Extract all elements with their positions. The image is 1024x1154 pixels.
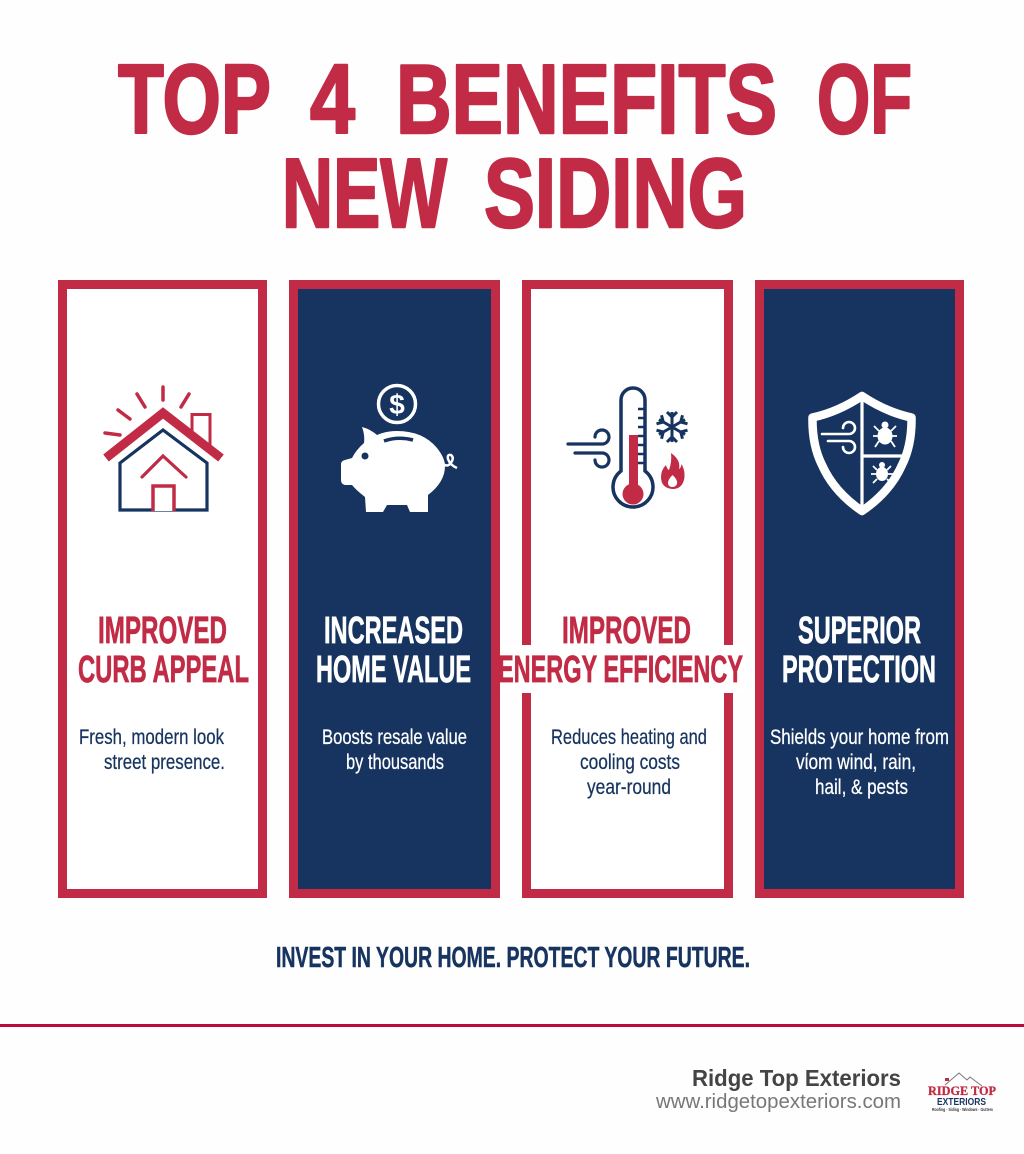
heading: improved energy efficiency: IMPROVED <box>562 610 691 652</box>
heading: increased home value <box>316 610 471 691</box>
description: protection: vίom wind, rain, <box>796 751 916 774</box>
logo: ridge top exteriors <box>928 1073 996 1112</box>
icon: piggy bank with coin <box>341 386 457 512</box>
title: TOP <box>118 44 271 154</box>
heading: increased home value: INCREASED <box>324 610 463 652</box>
panel: increased home value <box>294 284 496 894</box>
title: SIDING <box>484 138 747 248</box>
description: protection: hail, & pests <box>815 776 908 799</box>
logo: ridge top exteriors: RIDGE TOP <box>928 1083 996 1098</box>
logo: ridge top exteriors: Roofing · Siding · Windows · Gutters <box>932 1107 993 1112</box>
heading: increased home value: HOME VALUE <box>316 649 471 691</box>
description: protection: Shields your home from <box>770 726 949 749</box>
description: energy efficiency: Reduces heating and <box>551 726 707 749</box>
panel: improved curb appeal <box>62 284 262 894</box>
description: curb appeal <box>79 726 225 774</box>
heading: superior protection: PROTECTION <box>782 649 936 691</box>
footer company name and website: Ridge Top Exteriors <box>692 1065 901 1091</box>
title: 4 <box>310 44 355 154</box>
description: curb appeal: Fresh, modern look <box>79 726 224 749</box>
heading: improved energy efficiency: ENERGY EFFICIENCY <box>498 649 743 691</box>
heading: superior protection <box>782 610 936 691</box>
title: NEW <box>282 138 447 248</box>
title: OF <box>817 44 912 154</box>
icon: piggy bank with coin: $ <box>389 389 405 420</box>
panel: improved energy efficiency <box>498 284 746 894</box>
logo: ridge top exteriors: EXTERIORS <box>937 1097 986 1108</box>
description: home value: by thousands <box>346 751 444 774</box>
description: home value: Boosts resale value <box>322 726 467 749</box>
icon: shield with wind and pests <box>812 396 912 512</box>
heading: superior protection: SUPERIOR <box>798 610 921 652</box>
icon: house <box>105 387 221 511</box>
heading: improved curb appeal <box>78 610 249 691</box>
description: energy efficiency: cooling costs <box>580 751 680 774</box>
description: curb appeal: street presence. <box>104 751 225 774</box>
panel: superior protection <box>760 284 960 894</box>
tagline: INVEST IN YOUR HOME. PROTECT YOUR FUTURE. <box>276 942 750 974</box>
title <box>118 44 912 248</box>
icon: thermometer with wind, snowflake and flame <box>568 388 688 507</box>
heading: improved curb appeal: CURB APPEAL <box>78 649 249 691</box>
description: energy efficiency <box>551 726 707 799</box>
footer company name and website: www.ridgetopexteriors.com <box>655 1091 901 1113</box>
footer divider <box>0 1024 1024 1027</box>
description: home value <box>322 726 467 774</box>
title: BENEFITS <box>396 44 777 154</box>
footer company name and website <box>655 1065 901 1113</box>
heading: improved curb appeal: IMPROVED <box>98 610 227 652</box>
heading: improved energy efficiency <box>498 610 743 691</box>
description: protection <box>770 726 949 799</box>
description: energy efficiency: year-round <box>587 776 671 799</box>
